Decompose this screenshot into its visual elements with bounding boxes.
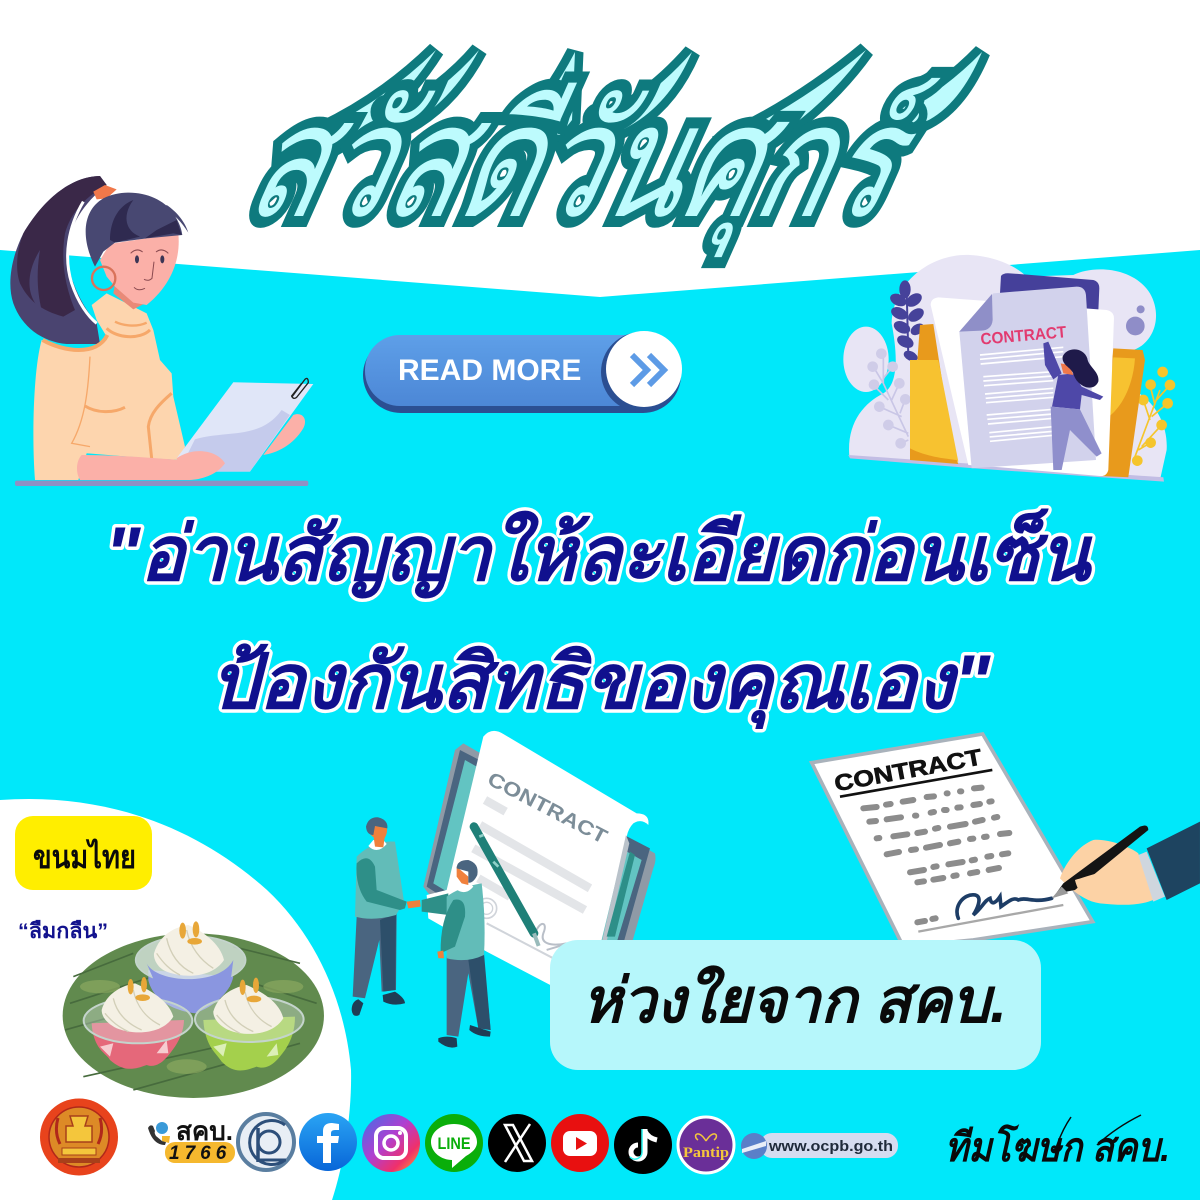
icon: TikTok — [614, 1116, 672, 1174]
speech box: concern from OCPB — [550, 940, 1041, 1070]
logo: CPB — [238, 1114, 294, 1170]
illustration: contract folder with woman — [843, 255, 1175, 482]
badge: Thai dessert — [15, 816, 152, 890]
label: contract: CONTRACT — [980, 323, 1067, 349]
cyan background — [0, 250, 1200, 1200]
label: contract: CONTRACT — [832, 743, 984, 796]
icon: X — [488, 1114, 546, 1172]
icon: globe — [741, 1133, 767, 1159]
icon: LINE: LINE — [438, 1134, 470, 1153]
main message text — [105, 508, 1093, 729]
website link: www.ocpb.go.th — [768, 1138, 893, 1155]
dessert cup: blue — [136, 921, 246, 1013]
icon: facebook — [299, 1113, 357, 1171]
dessert cup: red — [84, 977, 192, 1069]
quote line 1: "อ่านสัญญาให้ละเอียดก่อนเซ็น — [105, 508, 1093, 599]
logo: hotline 1766: สคบ. — [176, 1116, 233, 1146]
icon: hand with pen — [1052, 822, 1200, 905]
person right — [407, 860, 491, 1048]
logo: OCPB emblem — [40, 1098, 118, 1176]
quote line 2: ป้องกันสิทธิของคุณเอง" — [210, 640, 991, 729]
logo: hotline 1766: 1766 — [169, 1143, 231, 1164]
read more button — [363, 331, 682, 413]
icon: Pantip: Pantip — [683, 1145, 729, 1161]
icon: YouTube — [551, 1114, 609, 1172]
icon: pen — [474, 827, 539, 946]
white corner panel — [0, 799, 351, 1200]
illustration: dessert on banana leaf — [63, 921, 324, 1098]
logo: hotline 1766 — [148, 1116, 235, 1164]
icon: Pantip — [678, 1117, 734, 1173]
dessert name: “ลืมกลืน” — [18, 919, 108, 943]
website link — [741, 1133, 898, 1159]
illustration: two people shaking hands with contract — [352, 731, 656, 1048]
button label: READ MORE — [398, 354, 581, 387]
speech box text: ห่วงใยจาก สคบ. — [582, 965, 1007, 1036]
person left — [352, 817, 407, 1016]
illustration: signing contract hand — [812, 734, 1200, 947]
icon: LINE — [425, 1114, 483, 1172]
illustration: woman reading paper — [10, 176, 313, 486]
icon: double chevron — [632, 355, 664, 385]
signature: spokesperson team: ทีมโฆษก สคบ. — [945, 1123, 1170, 1170]
badge text: ขนมไทย — [33, 838, 136, 875]
icon: instagram — [362, 1114, 420, 1172]
signature — [957, 895, 1052, 918]
title: สวัสดีวันศุกร์ — [225, 75, 946, 257]
label: contract: CONTRACT — [484, 768, 611, 849]
dessert cup: green — [195, 978, 304, 1070]
